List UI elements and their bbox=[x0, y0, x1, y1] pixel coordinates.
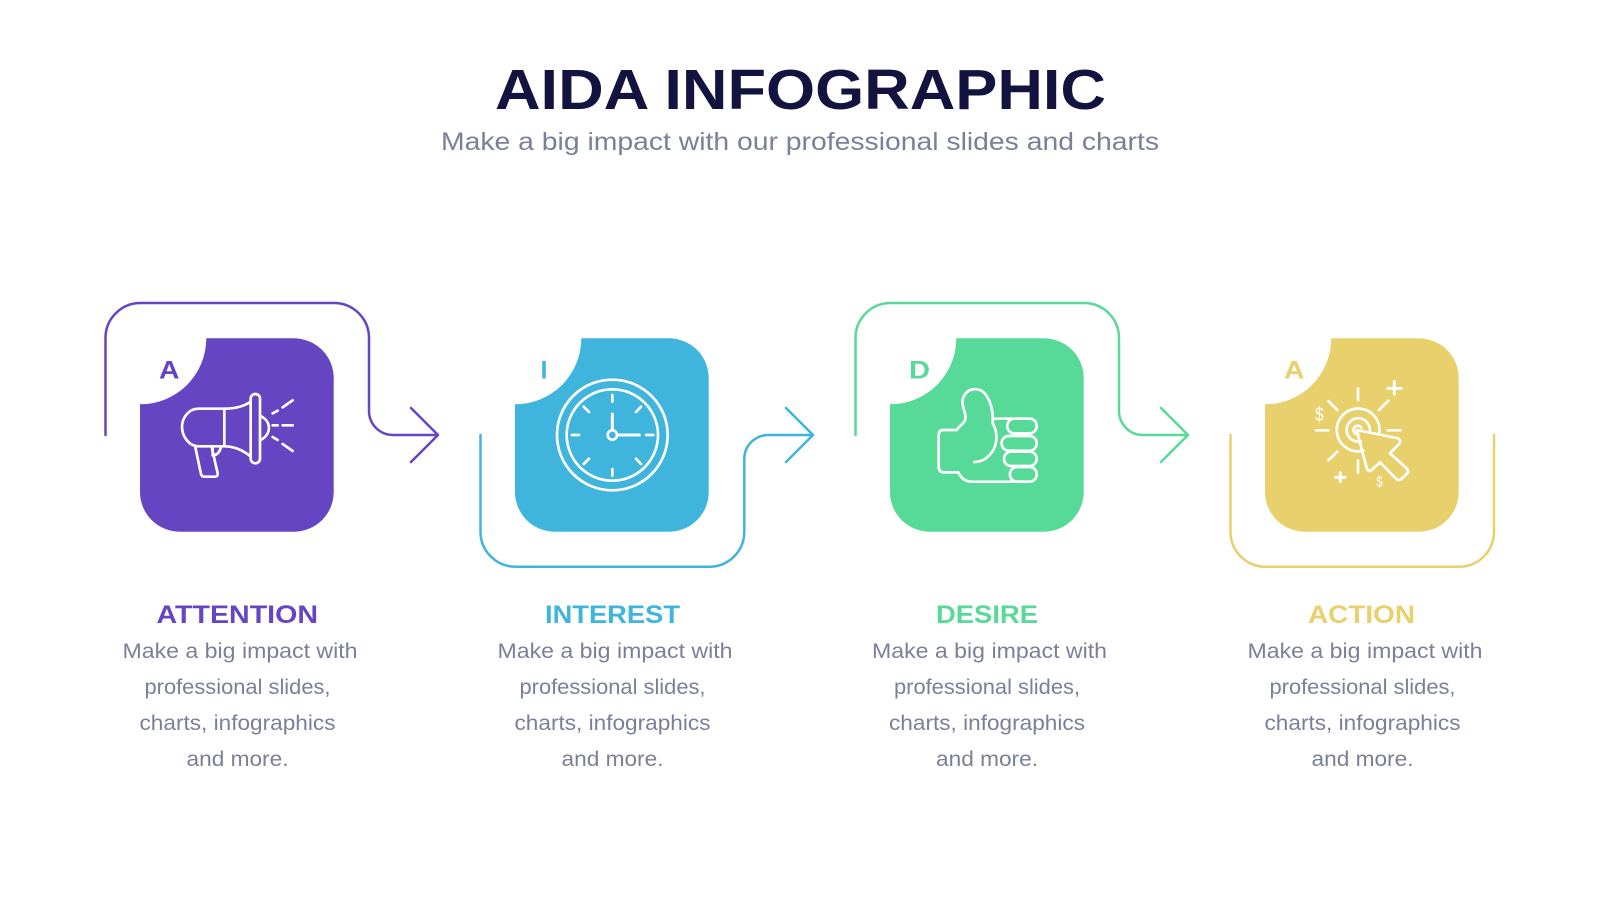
heading: attention: ATTENTION bbox=[156, 601, 318, 629]
description: attention: and more. bbox=[186, 748, 288, 771]
description: action: professional slides, bbox=[1270, 676, 1456, 699]
description: desire: and more. bbox=[936, 748, 1038, 771]
panel: desire bbox=[856, 303, 1188, 771]
icon: megaphone bbox=[182, 394, 293, 477]
letter I: I bbox=[540, 356, 548, 384]
description: attention: Make a big impact with bbox=[122, 640, 358, 663]
description: attention: charts, infographics bbox=[140, 712, 336, 735]
panel: attention bbox=[106, 303, 438, 771]
description: action: charts, infographics bbox=[1264, 712, 1460, 735]
heading: desire: DESIRE bbox=[936, 601, 1038, 629]
icon: thumbs up bbox=[939, 389, 1037, 482]
description: desire bbox=[872, 640, 1107, 771]
heading: action: ACTION bbox=[1308, 601, 1415, 629]
icon: clock bbox=[557, 380, 668, 490]
card: attention bbox=[140, 338, 334, 532]
description: interest: professional slides, bbox=[520, 676, 706, 699]
description: action bbox=[1248, 640, 1482, 771]
icon: click cursor bbox=[1315, 382, 1408, 490]
description: interest bbox=[498, 640, 732, 771]
description: action: Make a big impact with bbox=[1248, 640, 1482, 663]
arrow: interest connector bbox=[480, 408, 813, 567]
description: action: and more. bbox=[1312, 748, 1414, 771]
description: desire: Make a big impact with bbox=[872, 640, 1107, 663]
panel: interest bbox=[480, 338, 813, 771]
description: attention: professional slides, bbox=[144, 676, 330, 699]
bracket: action outline bbox=[1230, 435, 1494, 567]
icon: click cursor: $ bbox=[1376, 474, 1383, 490]
letter A: A bbox=[159, 356, 180, 384]
title: AIDA INFOGRAPHIC bbox=[495, 58, 1106, 122]
letter A: A bbox=[1284, 356, 1304, 384]
card: action bbox=[1265, 338, 1459, 532]
card: interest bbox=[515, 338, 709, 532]
description: interest: Make a big impact with bbox=[498, 640, 732, 663]
description: interest: and more. bbox=[562, 748, 664, 771]
arrow: attention connector bbox=[106, 303, 438, 462]
subtitle: Make a big impact with our professional slides and charts bbox=[441, 128, 1159, 156]
description: desire: charts, infographics bbox=[889, 712, 1085, 735]
description: desire: professional slides, bbox=[894, 676, 1080, 699]
arrow: desire connector bbox=[856, 303, 1188, 462]
panel: action bbox=[1230, 338, 1494, 771]
letter D: D bbox=[909, 356, 930, 384]
description: attention bbox=[122, 640, 358, 771]
icon: click cursor: $ bbox=[1315, 405, 1324, 426]
description: interest: charts, infographics bbox=[514, 712, 710, 735]
heading: interest: INTEREST bbox=[545, 601, 680, 629]
card: desire bbox=[890, 338, 1084, 532]
